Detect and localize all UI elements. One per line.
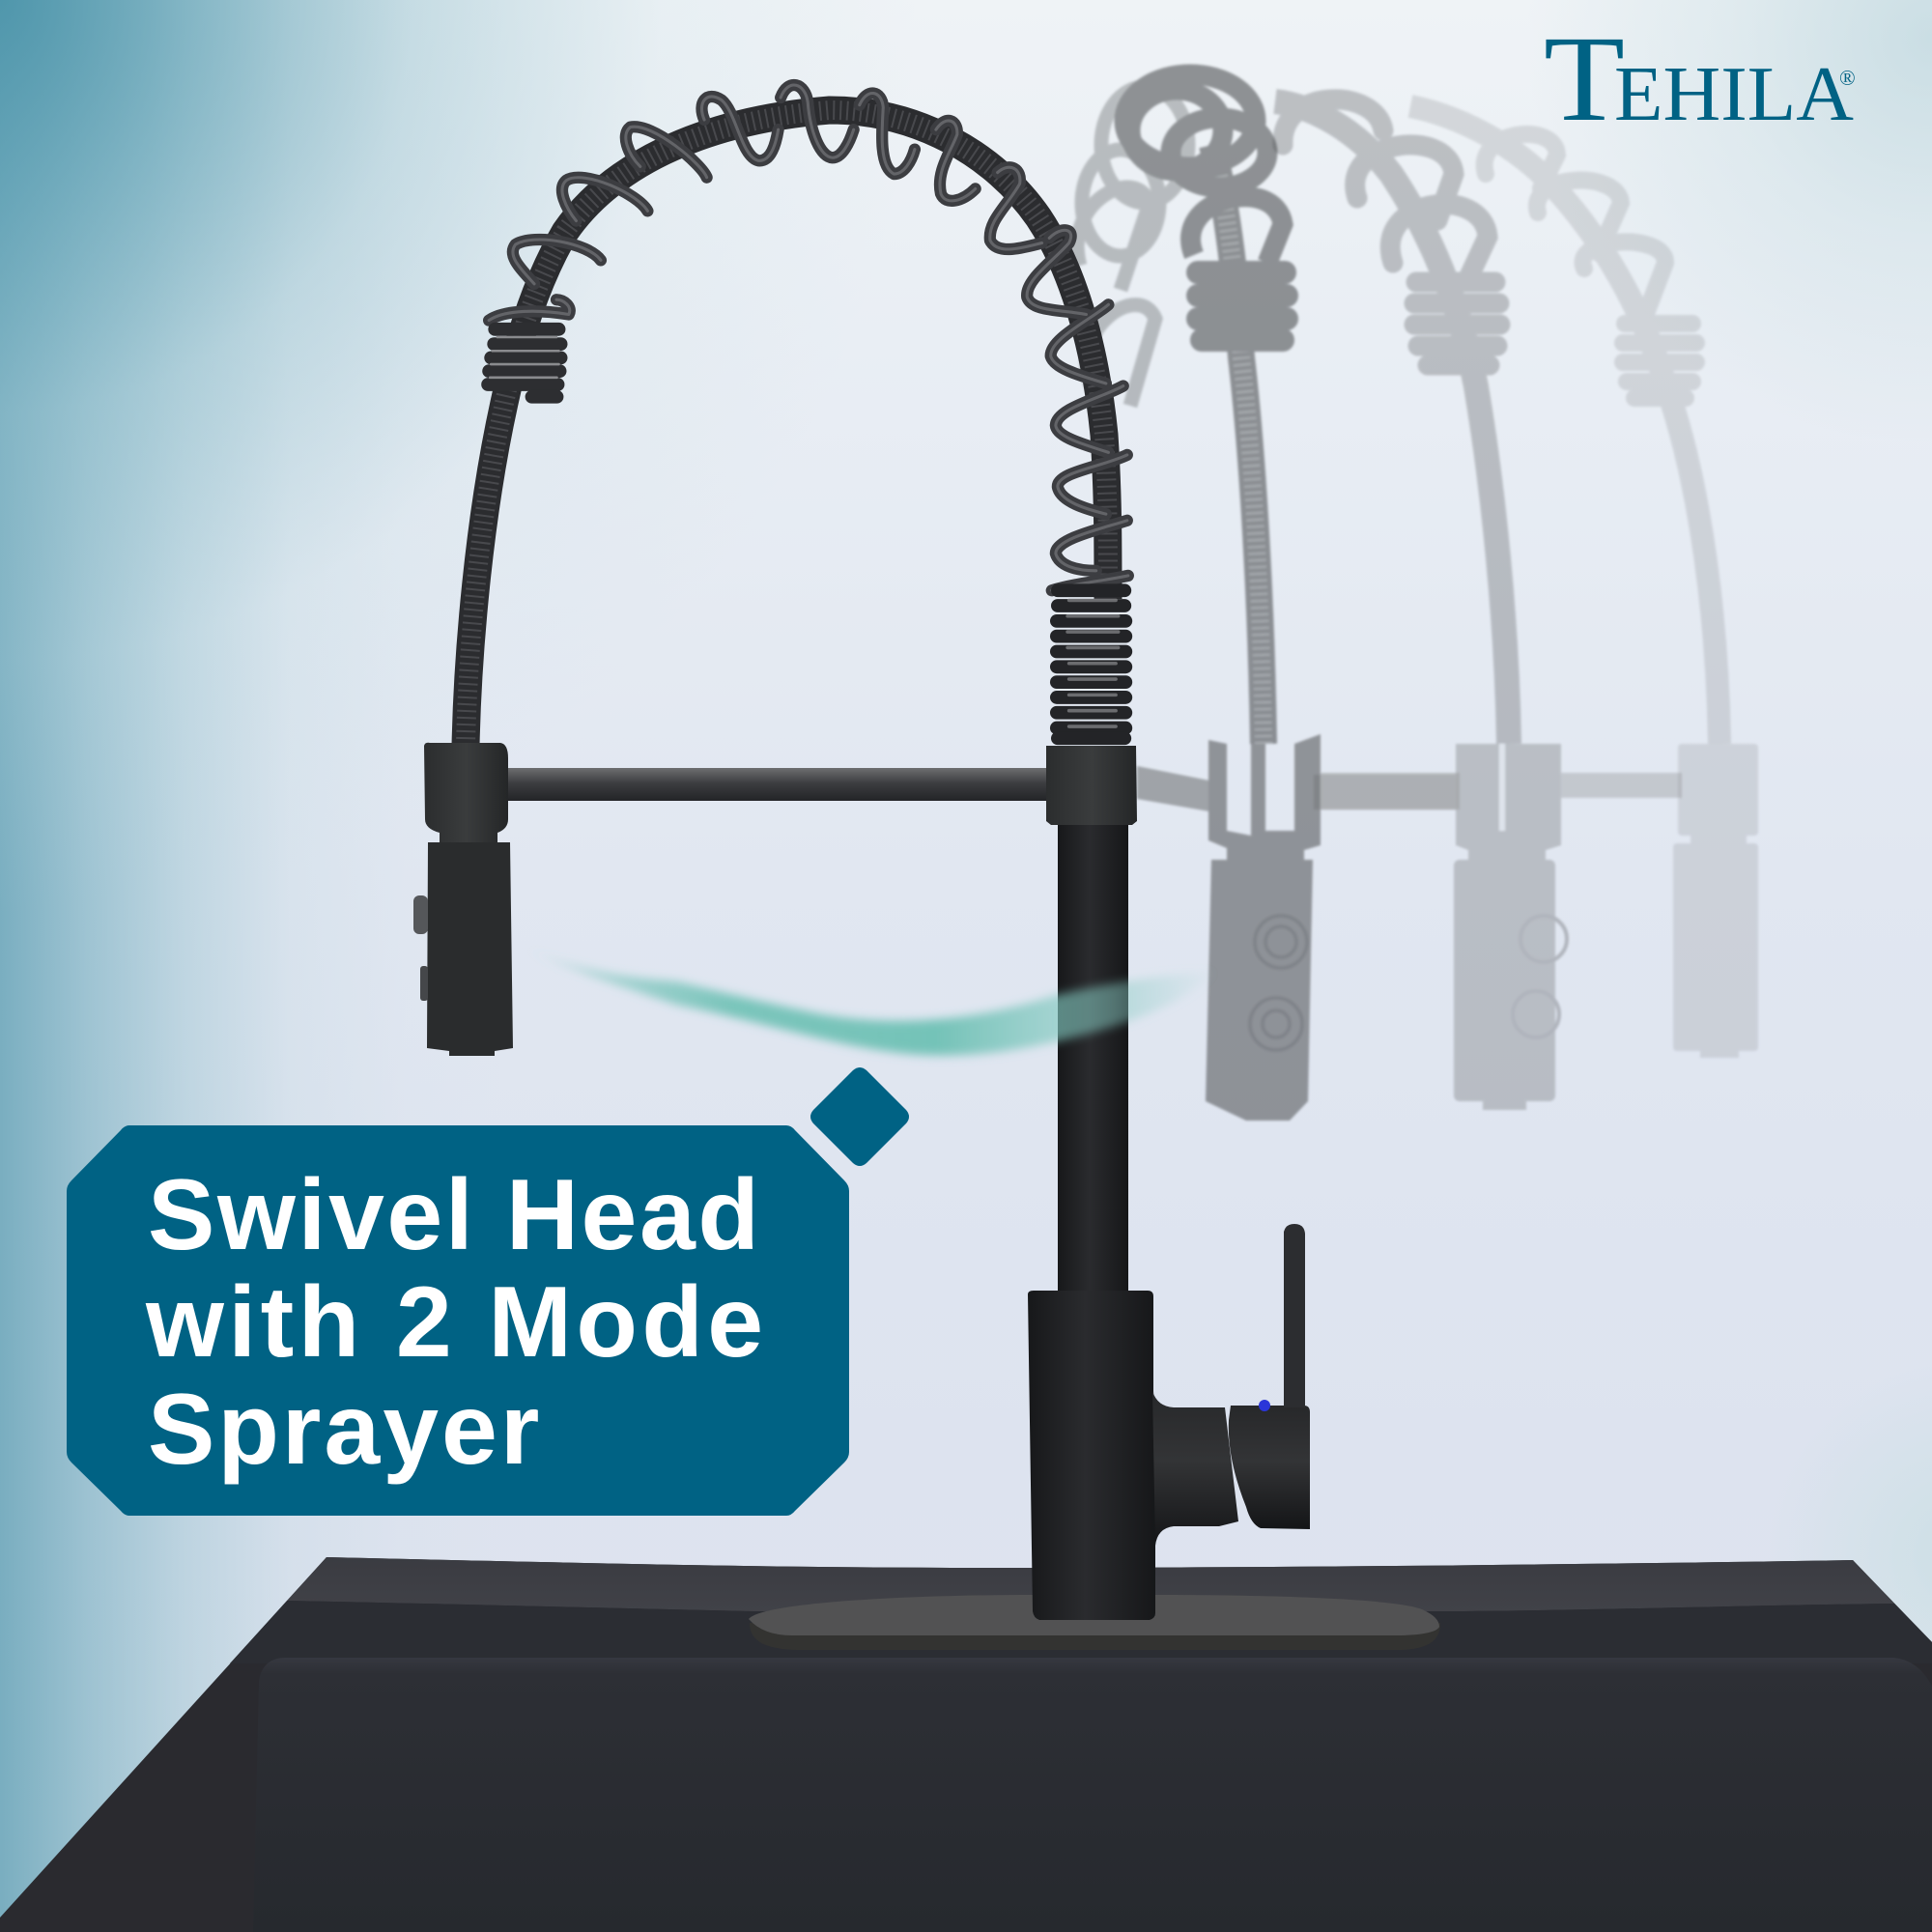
brand logo: ® <box>1839 66 1856 90</box>
ghost 2 coil <box>1283 99 1500 365</box>
ghost faucet 1 (darkest) <box>1077 74 1460 1121</box>
swoosh motion arc <box>522 947 1217 1055</box>
panel shape <box>67 1125 849 1516</box>
ghost 1 bar <box>1137 766 1209 811</box>
spray head body <box>427 842 513 1056</box>
callout text <box>145 1159 768 1486</box>
sink bowl <box>253 1658 1932 1932</box>
ghost 1 hose <box>1212 145 1264 744</box>
sink <box>0 1557 1932 1932</box>
ghost 1 hose braid <box>1212 145 1264 744</box>
ghost 1 coil wound <box>1198 272 1287 340</box>
ghost 1 buttons <box>1250 916 1307 1050</box>
spray head mount <box>424 743 508 842</box>
ghost faucet 2 <box>1275 99 1682 1110</box>
ghost 3 coil <box>1485 134 1696 398</box>
ghost 2 bar right <box>1561 773 1682 798</box>
spray head side button lower <box>420 966 428 1001</box>
ghost 1 left back loops <box>1077 87 1188 406</box>
coil loops dark <box>489 85 1128 590</box>
main faucet <box>413 85 1440 1650</box>
ghost 1 head <box>1206 734 1321 1121</box>
hose base <box>466 110 1108 746</box>
sink ledge front <box>230 1601 1932 1663</box>
callout text: Sprayer <box>148 1374 542 1486</box>
ghost 2 head <box>1454 744 1561 1110</box>
callout text: with 2 Mode <box>145 1266 768 1378</box>
blue indicator dot <box>1259 1400 1270 1411</box>
coil loops highlight <box>489 85 1128 590</box>
base plate <box>749 1595 1440 1650</box>
ghost 2 hose <box>1275 101 1509 744</box>
braided hose <box>466 110 1108 746</box>
ghost 3 hose <box>1410 106 1719 744</box>
brand logo <box>1544 12 1856 147</box>
ghost 1 coil upper <box>1124 74 1283 263</box>
decorative diamond <box>810 1067 909 1166</box>
ghost 2 buttons <box>1513 916 1567 1037</box>
right collar <box>1046 746 1137 825</box>
ghost faucet 3 (faintest) <box>1410 106 1758 1058</box>
callout panel <box>67 1067 909 1516</box>
ghost 2 slot <box>1499 744 1505 831</box>
faucet body column <box>1028 1291 1155 1620</box>
right wound spring <box>1057 590 1125 738</box>
cross bar <box>506 768 1049 801</box>
hose braid <box>466 110 1108 746</box>
ghost 1 bar right <box>1320 773 1460 810</box>
ghost 3 head <box>1673 744 1758 1058</box>
plate top face <box>749 1595 1439 1635</box>
handle cap <box>1229 1406 1310 1529</box>
sink back ledge <box>287 1557 1894 1611</box>
handle neck <box>1152 1391 1238 1546</box>
left wound spring <box>488 329 561 397</box>
callout text: Swivel Head <box>148 1159 762 1271</box>
sink outer body <box>0 1557 1932 1932</box>
spring coils <box>488 85 1128 738</box>
left wound spring highlight <box>490 337 559 378</box>
spray head side button <box>413 895 428 934</box>
brand logo: T <box>1544 12 1625 147</box>
ghost 2 bar <box>1314 775 1459 810</box>
plate front edge <box>750 1623 1440 1650</box>
handle lever <box>1284 1224 1305 1407</box>
brand logo: EHILA <box>1614 52 1854 137</box>
stem <box>1058 821 1128 1294</box>
